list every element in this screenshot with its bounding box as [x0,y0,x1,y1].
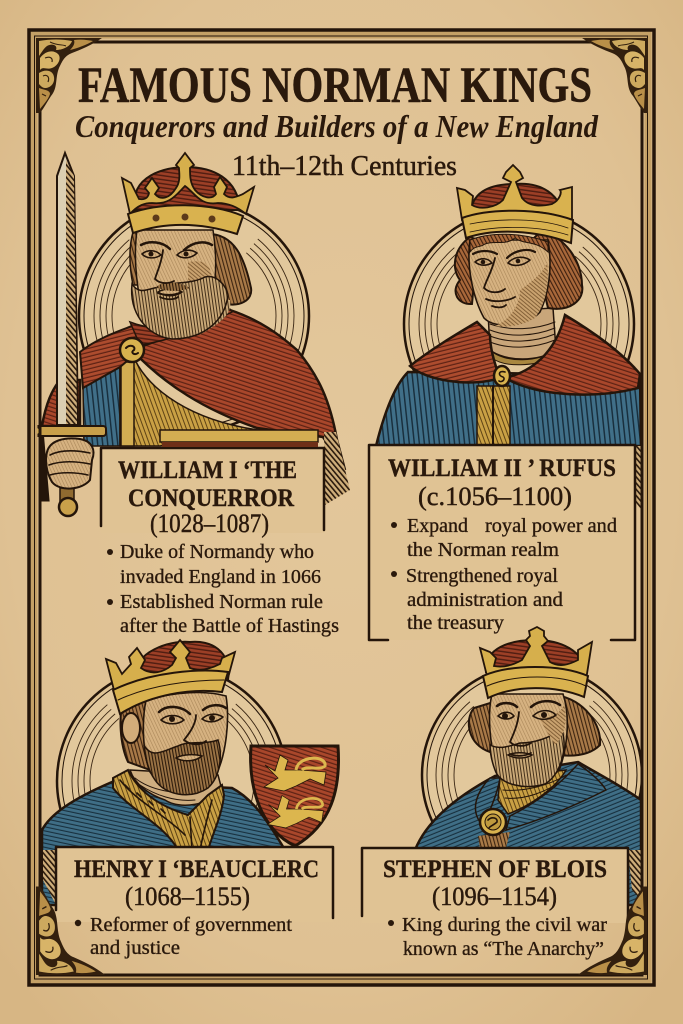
dates: William I: (1028–1087) [150,509,269,538]
subtitle: Conquerors and Builders of a New England [75,108,599,144]
dates: Stephen: (1096–1154) [432,882,557,911]
name: William II: WILLIAM II ’ RUFUS [388,455,616,482]
ornament: top-left corner [36,38,102,113]
portrait: Henry I [42,640,339,905]
ornament: top-right corner [582,38,648,113]
fact: Reformer: Reformer of government [90,914,292,936]
panel: Henry I [56,847,333,959]
fact: treasury: the treasury [407,612,504,634]
icon: lion 2 [268,796,323,828]
bullet [391,522,397,528]
bullet [107,549,113,555]
fact: royal power: royal power and [485,515,617,537]
fact: invaded England: invaded England in 1066 [120,566,321,588]
fact: after Hastings: after the Battle of Hastings [120,615,339,637]
panel: William I [101,430,339,637]
fact: The Anarchy: known as “The Anarchy” [403,938,604,960]
dates: Henry I: (1068–1155) [125,882,250,911]
fact: Established Norman rule: Established Norman rule [120,591,323,613]
fact: Expand: Expand [407,515,468,537]
icon: lion 1 [264,755,326,791]
dates: William II: (c.1056–1100) [418,482,572,511]
bullet [391,571,397,577]
name: William I: WILLIAM I ‘THE [118,457,297,484]
portrait: Stephen [415,627,642,905]
ornament: bottom-left corner [36,886,105,975]
portrait: William II [376,165,641,510]
name: Stephen: STEPHEN OF BLOIS [383,856,607,883]
panel: William II [369,445,635,640]
bullet [388,920,394,926]
name: the Conquerror: CONQUERROR [128,485,295,512]
panel: Stephen [362,848,628,960]
ornament: bottom-right corner [578,886,647,975]
fact: administration: administration and [407,589,563,611]
fact: King during: King during the civil war [402,914,607,936]
name: Henry I: HENRY I ‘BEAUCLERC [74,856,319,883]
fact: justice: and justice [90,937,180,959]
bullet [107,599,113,605]
date range: 11th–12th Centuries [232,151,457,182]
portrait: William I [32,153,350,516]
fact: Duke of Normandy: Duke of Normandy who [120,541,314,563]
fact: Strengthened royal: Strengthened royal [406,565,558,587]
bullet [75,920,81,926]
fact: Norman realm: the Norman realm [407,539,559,561]
